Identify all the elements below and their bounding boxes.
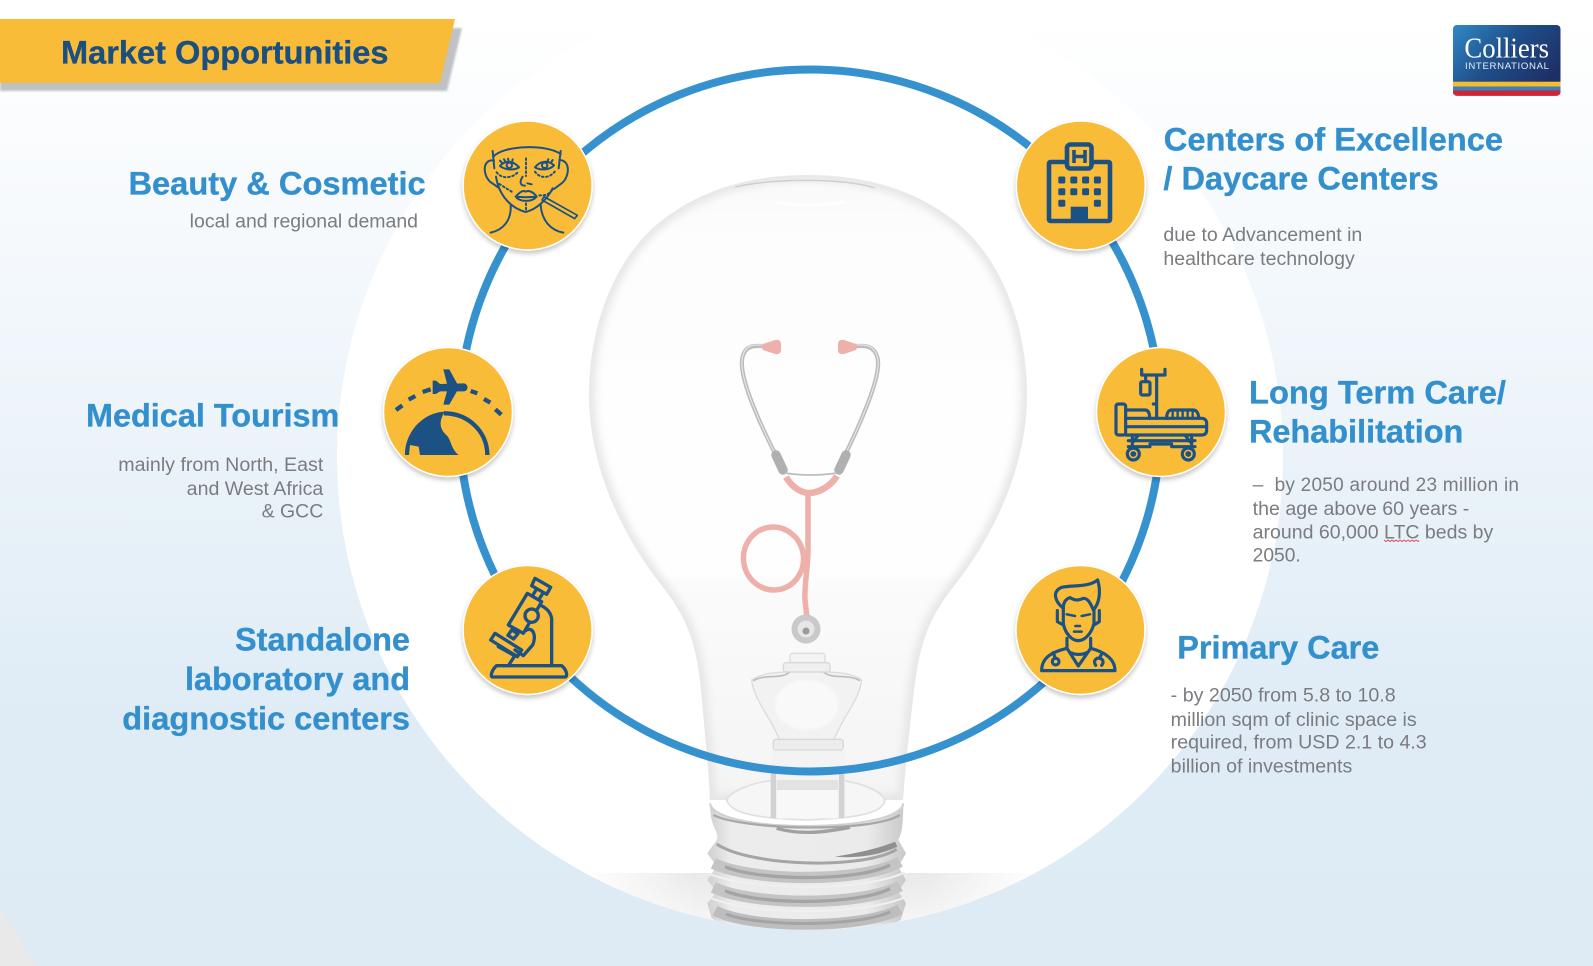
label: primary care: billion of investments bbox=[1171, 757, 1352, 778]
label: long term care: 2050. bbox=[1253, 546, 1301, 567]
blue ring bbox=[459, 70, 1161, 772]
label: centers of excellence: / Daycare Centers bbox=[1163, 160, 1439, 196]
connectors bbox=[776, 455, 783, 470]
label: long term care: the age above 60 years - bbox=[1253, 499, 1469, 520]
icon: hospital bed bbox=[1096, 348, 1226, 476]
label: long term care: – by 2050 around 23 million in bbox=[1253, 475, 1519, 496]
label: primary care: million sqm of clinic space is bbox=[1171, 710, 1417, 731]
label: long term care: Long Term Care/ bbox=[1249, 374, 1506, 410]
logo: Colliers International: Colliers bbox=[1464, 34, 1549, 65]
label: primary care: required, from USD 2.1 to 4.3 bbox=[1171, 732, 1427, 753]
screw base bbox=[707, 803, 906, 932]
label: medical tourism: mainly from North, East bbox=[118, 455, 324, 476]
title banner bbox=[0, 19, 462, 91]
label: long term care: Rehabilitation bbox=[1249, 414, 1463, 450]
label: centers of excellence: due to Advancement in bbox=[1163, 225, 1362, 246]
banner shadow bbox=[0, 28, 462, 91]
label: centers of excellence bbox=[1163, 122, 1503, 270]
label: long term care bbox=[1249, 374, 1519, 567]
light bulb illustration bbox=[584, 175, 1036, 943]
icon: microscope bbox=[463, 566, 592, 694]
label: primary care bbox=[1171, 629, 1427, 778]
logo: Colliers International bbox=[1453, 25, 1560, 96]
label: standalone laboratory: Standalone bbox=[235, 622, 410, 658]
chest piece bbox=[792, 614, 820, 644]
label: medical tourism bbox=[86, 398, 339, 522]
title: Market Opportunities bbox=[61, 34, 388, 70]
label: medical tourism: Medical Tourism bbox=[86, 398, 339, 434]
label: beauty and cosmetic: Beauty & Cosmetic bbox=[128, 165, 426, 201]
binaural tubes bbox=[742, 346, 778, 459]
label: standalone laboratory: diagnostic centers bbox=[122, 700, 410, 736]
white backdrop circle bbox=[337, 0, 1283, 930]
stethoscope bbox=[739, 340, 878, 644]
icon: beauty face bbox=[463, 121, 592, 250]
label: primary care: Primary Care bbox=[1177, 629, 1379, 665]
label: standalone laboratory bbox=[122, 622, 410, 736]
label: standalone laboratory: laboratory and bbox=[185, 661, 410, 697]
bulb stem and filament support bbox=[727, 653, 885, 820]
icon: doctor bbox=[1016, 566, 1145, 694]
label: beauty and cosmetic: local and regional demand bbox=[190, 212, 418, 233]
corner wedge bbox=[0, 909, 37, 966]
icon: airplane over globe bbox=[384, 348, 512, 476]
bulb glass bbox=[589, 175, 1027, 800]
label: beauty and cosmetic bbox=[128, 165, 426, 233]
logo: Colliers International: INTERNATIONAL bbox=[1465, 61, 1550, 72]
rubber tubing bbox=[786, 476, 837, 493]
ear tips bbox=[762, 340, 781, 354]
label: centers of excellence: healthcare technology bbox=[1163, 249, 1355, 270]
icon: hospital building bbox=[1016, 121, 1145, 250]
banner bar bbox=[0, 19, 455, 83]
label: centers of excellence: Centers of Excellence bbox=[1164, 122, 1503, 158]
label: medical tourism: & GCC bbox=[262, 501, 323, 522]
label: medical tourism: and West Africa bbox=[187, 479, 324, 500]
label: long term care: around 60,000 LTC beds by bbox=[1253, 522, 1494, 543]
label: primary care: - by 2050 from 5.8 to 10.8 bbox=[1171, 686, 1396, 707]
table surface bbox=[628, 873, 992, 922]
